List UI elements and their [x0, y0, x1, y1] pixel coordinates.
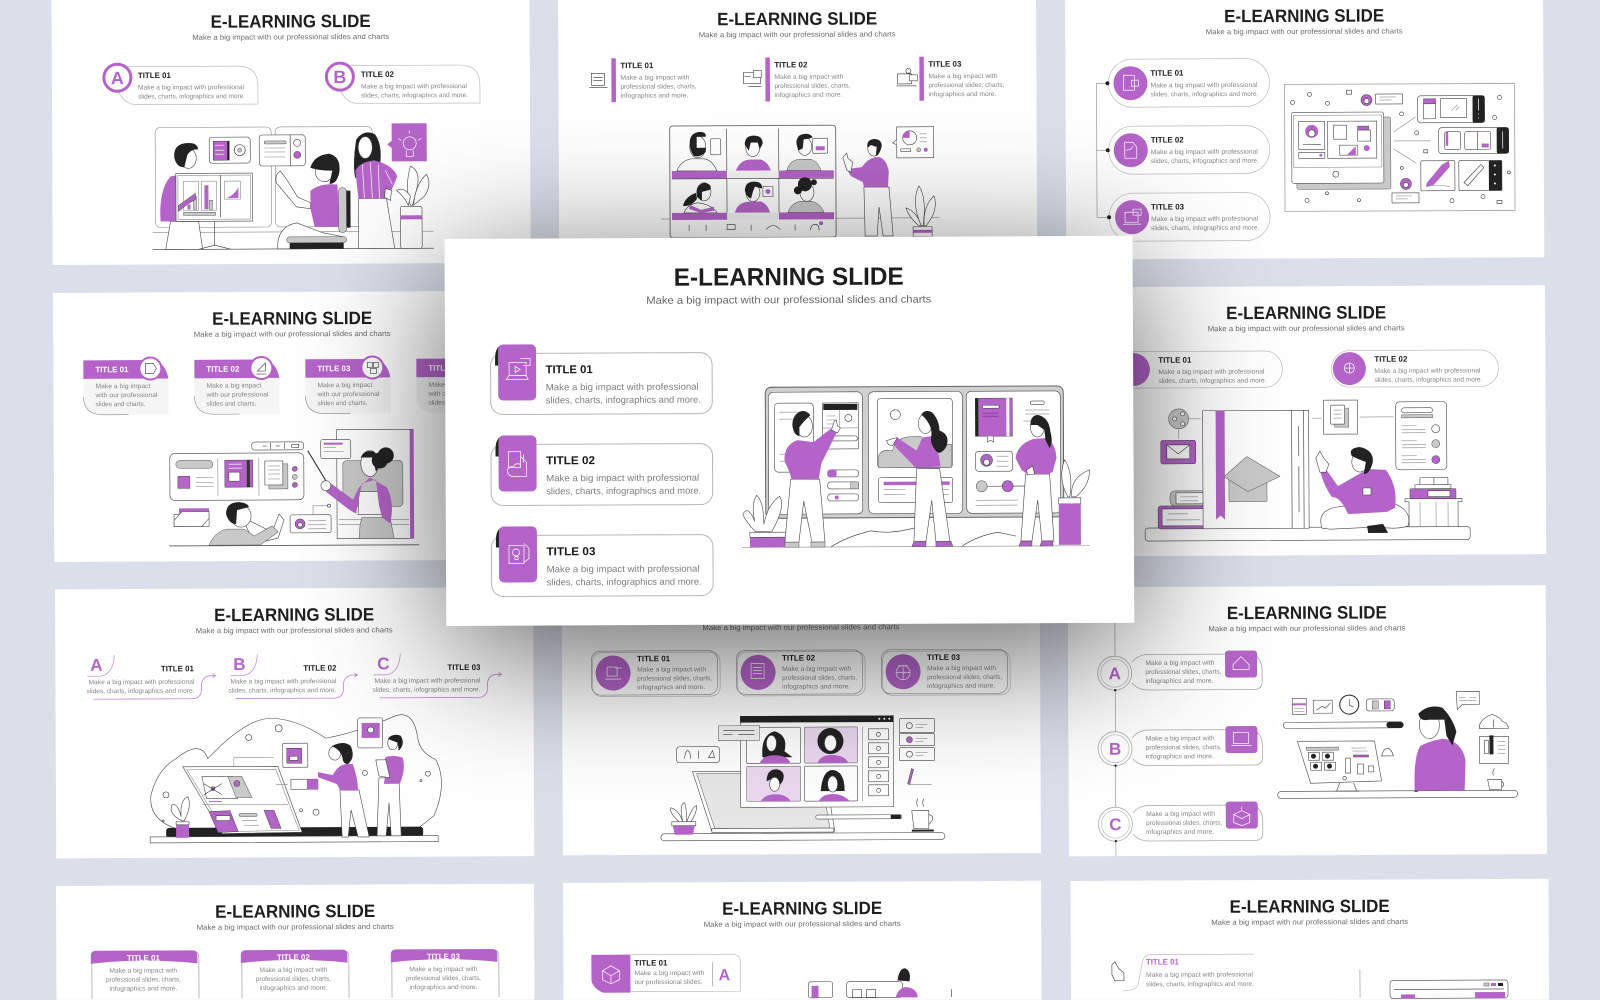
card 03: Make a big impact with — [409, 966, 478, 973]
card B: slides, charts, infographics and more. — [361, 92, 468, 100]
subheading: Make a big impact with our professional slides and charts — [194, 329, 391, 339]
card 01: infographics and more. — [109, 985, 178, 993]
connector bracket — [1096, 83, 1108, 217]
card 01: Make a big impact with — [637, 666, 706, 674]
item B: slides, charts, infographics and more. — [228, 687, 337, 695]
subheading: Make a big impact with our professional slides and charts — [197, 922, 394, 932]
card B: Make a big impact with professional — [361, 83, 467, 91]
card 03: TITLE 03 — [546, 546, 596, 558]
slide: three banner cards, cropped at bottom — [56, 884, 535, 1000]
heading: E-LEARNING SLIDE — [212, 308, 372, 329]
card 01: Make a big impact — [95, 383, 151, 390]
card 01: with our professional — [94, 392, 158, 399]
card 01: slides and charts. — [96, 401, 146, 408]
subheading: Make a big impact with our professional slides and charts — [196, 625, 393, 635]
item 02: TITLE 02 — [774, 60, 808, 69]
pill 02 — [1106, 126, 1270, 174]
subheading: Make a big impact with our professional slides and charts — [704, 919, 901, 929]
card 03: slides and charts. — [318, 400, 368, 407]
subheading: Make a big impact with our professional slides and charts — [702, 622, 900, 632]
card 02: slides and charts. — [207, 401, 257, 408]
card B — [326, 62, 480, 104]
card 01: infographics and more. — [637, 684, 705, 691]
item 01: TITLE 01 — [620, 61, 654, 70]
subheading: Make a big impact with our professional slides and charts — [1211, 917, 1409, 927]
subheading: Make a big impact with our professional slides and charts — [699, 29, 896, 39]
illustration: teacher and student — [169, 429, 419, 546]
slide: side banner card, cropped at bottom — [563, 881, 1042, 1000]
item A: infographics and more. — [1145, 678, 1214, 685]
item A: A — [90, 656, 103, 675]
item A: Make a big impact with professional — [88, 679, 195, 686]
item 02 — [743, 57, 851, 102]
slide: four cards with teacher on tablet — [53, 291, 532, 562]
card 03: professional slides, charts, — [927, 674, 1002, 681]
pill 01: Make a big impact with professional — [1158, 368, 1265, 376]
card 03 — [881, 649, 1010, 695]
item B: TITLE 02 — [303, 664, 337, 673]
subheading: Make a big impact with our professional slides and charts — [1208, 623, 1406, 633]
item C: C — [1109, 815, 1122, 834]
illustration: cropped browser window — [1360, 969, 1508, 999]
main heading: E-LEARNING SLIDE — [674, 263, 904, 292]
pill 02: TITLE 02 — [1151, 135, 1184, 145]
item A: Make a big impact with — [1145, 660, 1215, 667]
card A: A — [111, 68, 124, 88]
pill 01: TITLE 01 — [1150, 69, 1184, 78]
item B: professional slides, charts, — [1146, 744, 1222, 752]
slide: three pill cards with connected app board — [1065, 0, 1544, 259]
heading: E-LEARNING SLIDE — [211, 11, 371, 32]
pill 03 — [1107, 193, 1270, 241]
card 01 — [1112, 954, 1254, 991]
card 03: Make a big impact with — [927, 665, 996, 672]
item C: infographics and more. — [1146, 829, 1214, 836]
illustration: connected app board — [1284, 83, 1515, 211]
pill 02: slides, charts, infographics and more. — [1374, 376, 1483, 384]
item C: C — [377, 654, 390, 673]
card 01: professional slides, charts, — [106, 976, 181, 984]
slide: vertical A B C timeline with desk worker — [1068, 585, 1547, 856]
card 02: infographics and more. — [782, 683, 850, 691]
item 03: Make a big impact with — [928, 73, 998, 80]
timeline axis — [1115, 617, 1116, 856]
card 01: slides, charts, infographics and more. — [546, 395, 701, 405]
pill 02: slides, charts, infographics and more. — [1151, 158, 1259, 165]
item A: slides, charts, infographics and more. — [86, 688, 195, 695]
item 01: Make a big impact with — [620, 74, 690, 82]
card 02: professional slides, charts, — [782, 675, 857, 682]
item 01 — [589, 58, 697, 102]
card A: Make a big impact with — [634, 970, 705, 977]
card 04: slides and charts. — [429, 399, 479, 407]
subheading: Make a big impact with our professional slides and charts — [1206, 26, 1403, 36]
heading: E-LEARNING SLIDE — [1224, 5, 1384, 26]
item C: slides, charts, infographics and more. — [372, 686, 481, 694]
card A: TITLE 01 — [634, 959, 668, 968]
item C — [1098, 801, 1263, 842]
card 02: TITLE 02 — [546, 455, 595, 467]
illustration: three people at a learning board — [741, 386, 1090, 547]
pill 01 — [1105, 59, 1270, 107]
pill 01: Make a big impact with professional — [1150, 82, 1258, 89]
pill 01: slides, charts, infographics and more. — [1150, 91, 1259, 98]
item B — [228, 654, 358, 699]
illustration: team at whiteboard — [152, 123, 434, 250]
heading: E-LEARNING SLIDE — [215, 901, 375, 922]
card 01 — [83, 357, 169, 415]
card 02: slides, charts, infographics and more. — [546, 486, 701, 496]
slide: A B C arrows with laptop and colleagues — [55, 587, 534, 858]
card 04: TITLE 04 — [428, 364, 462, 373]
card 03: infographics and more. — [927, 683, 995, 690]
card 01 — [591, 651, 720, 697]
item B: B — [233, 655, 246, 674]
pill 03: Make a big impact with professional — [1151, 216, 1259, 223]
card 03: Make a big impact — [317, 382, 373, 389]
pill 02: Make a big impact with professional — [1151, 149, 1258, 156]
card 03: slides, charts, infographics and more. — [547, 577, 702, 587]
item C — [372, 653, 502, 698]
main slide background with shadow — [444, 236, 1134, 626]
illustration: laptop and colleagues on blob — [150, 715, 442, 843]
card A — [104, 64, 258, 105]
card 03: professional slides, charts, — [406, 975, 481, 982]
heading: E-LEARNING SLIDE — [214, 604, 374, 625]
card 01: TITLE 01 — [637, 654, 671, 663]
item C: professional slides, charts, — [1146, 820, 1222, 827]
heading: E-LEARNING SLIDE — [1226, 302, 1386, 323]
card 02: Make a big impact with — [259, 967, 328, 974]
card 02: TITLE 02 — [277, 953, 310, 962]
item B: Make a big impact with — [1146, 735, 1215, 743]
heading: E-LEARNING SLIDE — [722, 898, 882, 919]
main slide content — [490, 262, 1090, 597]
card 01 — [91, 950, 199, 999]
card 02: Make a big impact with professional — [546, 473, 699, 483]
item 02: Make a big impact with — [774, 74, 844, 81]
illustration: cropped boards and person — [808, 968, 952, 998]
item 03: TITLE 03 — [928, 60, 962, 69]
pill 03: slides, charts, infographics and more. — [1151, 225, 1259, 232]
slide: three titled items with video call — [558, 0, 1037, 262]
item A: professional slides, charts, — [1145, 669, 1222, 676]
card A: slides, charts, infographics and more. — [138, 93, 245, 101]
item A — [86, 655, 216, 699]
item 02: professional slides, charts, — [774, 83, 851, 90]
illustration: laptop with meeting window — [660, 715, 945, 841]
item C: TITLE 03 — [447, 663, 481, 672]
card 02: TITLE 02 — [206, 365, 240, 374]
illustration: video call tablet and presenter — [661, 125, 939, 238]
card 04: with our professional — [427, 390, 491, 398]
card 01: TITLE 01 — [546, 364, 593, 376]
item 02: infographics and more. — [774, 92, 843, 99]
card B: B — [333, 67, 346, 87]
item 03: professional slides, charts, — [928, 82, 1005, 89]
main slide: featured E-Learning slide — [444, 236, 1134, 626]
item 01: professional slides, charts, — [620, 83, 697, 91]
item A — [1098, 650, 1262, 691]
main subheading: Make a big impact with our professional slides and charts — [646, 294, 931, 307]
pill 01 — [1115, 351, 1282, 388]
card 02: Make a big impact — [206, 383, 262, 390]
pill 02: TITLE 02 — [1374, 355, 1408, 364]
card 02: infographics and more. — [259, 985, 328, 992]
card 03: TITLE 03 — [427, 952, 460, 961]
pill 02 — [1331, 350, 1498, 387]
item A: A — [1109, 664, 1121, 683]
item C: Make a big impact with — [1146, 811, 1215, 818]
pill 01: TITLE 01 — [1158, 356, 1192, 365]
card 01: TITLE 01 — [95, 365, 129, 374]
item 01: infographics and more. — [620, 92, 689, 100]
card 01: Make a big impact with professional — [1146, 971, 1254, 979]
subheading: Make a big impact with our professional slides and charts — [192, 32, 390, 42]
card 02 — [241, 950, 349, 998]
card B: TITLE 02 — [361, 70, 394, 79]
card 01: professional slides, charts, — [637, 675, 712, 683]
card 02: with our professional — [205, 391, 269, 399]
card 03 — [305, 356, 391, 414]
card A — [591, 954, 741, 993]
card 02 — [491, 435, 713, 506]
card A: A — [719, 967, 731, 984]
slide: title with gesture icon, cropped at bottom — [1070, 879, 1549, 1000]
slide: three rounded cards with online meeting window — [562, 584, 1041, 855]
heading: E-LEARNING SLIDE — [717, 8, 877, 29]
card 02 — [194, 357, 280, 414]
item 03 — [896, 56, 1005, 101]
item B: Make a big impact with professional — [230, 678, 337, 686]
card 03: Make a big impact with professional — [547, 564, 700, 574]
slide: two pills with book and student — [1067, 285, 1546, 556]
card 01 — [490, 344, 712, 415]
card 03 — [391, 949, 499, 997]
heading: E-LEARNING SLIDE — [1227, 602, 1387, 623]
illustration: desk worker with monitor — [1277, 691, 1518, 798]
card 02: TITLE 02 — [782, 654, 816, 663]
item 03: infographics and more. — [928, 91, 997, 98]
pill 03: TITLE 03 — [1151, 202, 1185, 212]
card 03: TITLE 03 — [317, 364, 351, 373]
item B: B — [1109, 740, 1121, 759]
illustration: book, cap and student — [1145, 400, 1470, 541]
card 03 — [491, 526, 713, 597]
card 01: TITLE 01 — [1146, 957, 1179, 967]
card A: TITLE 01 — [138, 71, 171, 80]
card 02 — [736, 650, 865, 696]
pill 02: Make a big impact with professional — [1374, 367, 1481, 375]
item A: TITLE 01 — [161, 664, 194, 673]
card 04 — [416, 358, 502, 413]
card 01: Make a big impact with professional — [546, 382, 699, 392]
slide: two lettered cards with team at whiteboard — [52, 0, 531, 265]
card 01: Make a big impact with — [109, 967, 178, 975]
card A: Make a big impact with professional — [138, 84, 244, 92]
card 02: professional slides, charts, — [256, 976, 331, 983]
card 04: Make a big impact — [428, 381, 484, 389]
item C: Make a big impact with professional — [374, 677, 481, 685]
card 01: slides, charts, infographics and more. — [1146, 981, 1254, 988]
card 03: TITLE 03 — [927, 653, 961, 662]
pill 01: slides, charts, infographics and more. — [1158, 377, 1267, 385]
card 03: infographics and more. — [409, 984, 478, 991]
heading: E-LEARNING SLIDE — [721, 601, 881, 622]
card A: our professional slides. — [634, 979, 703, 986]
card 03: with our professional — [316, 391, 380, 398]
heading: E-LEARNING SLIDE — [1230, 896, 1390, 917]
card 01: TITLE 01 — [127, 954, 160, 963]
item B: infographics and more. — [1146, 753, 1214, 761]
card 02: Make a big impact with — [782, 666, 851, 673]
item B — [1098, 726, 1263, 767]
subheading: Make a big impact with our professional slides and charts — [1208, 323, 1405, 333]
